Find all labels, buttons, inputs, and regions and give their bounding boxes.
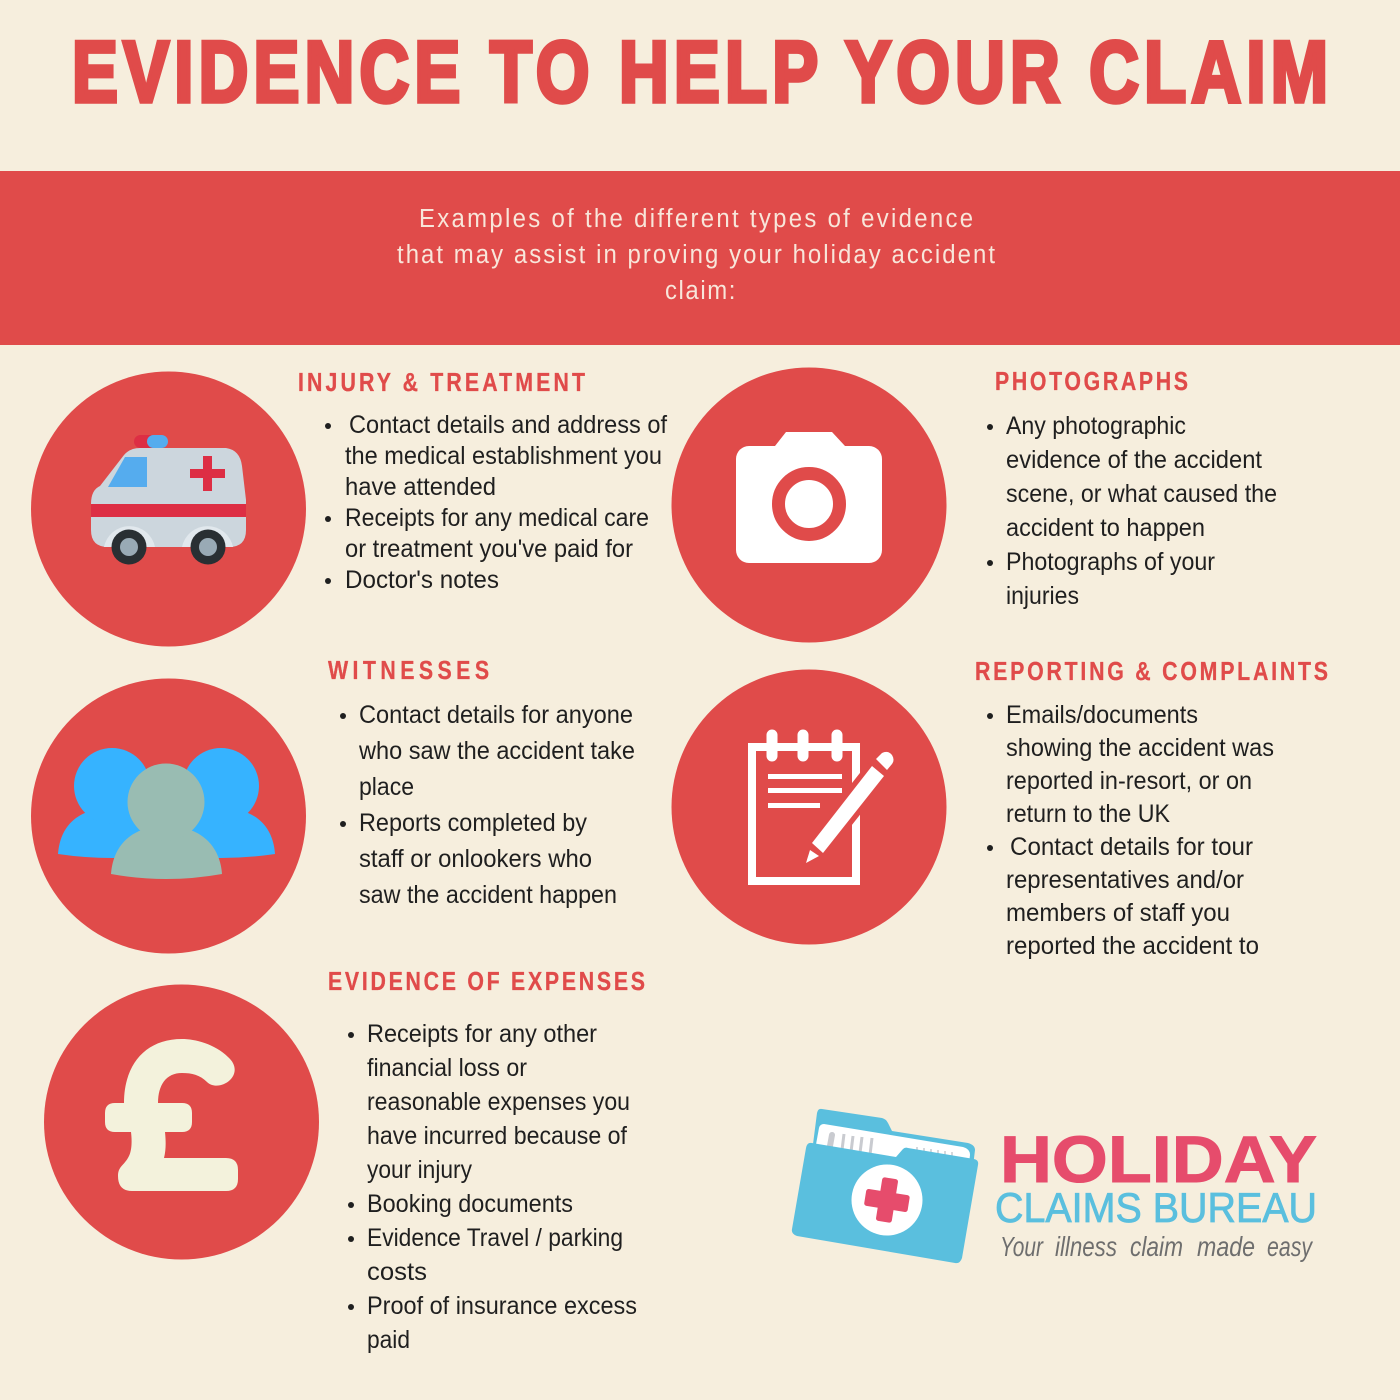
- panel: reporting and complaints: [672, 657, 1328, 960]
- list: expenses: costs: [367, 1258, 427, 1286]
- logo: Holiday Claims Bureau: [792, 1109, 1317, 1263]
- logo wordmark: Claims Bureau: CLAIMS BUREAU: [995, 1184, 1317, 1231]
- title: EVIDENCE TO HELP YOUR CLAIM: [72, 24, 1328, 121]
- panel: photographs: [672, 367, 1277, 642]
- list: photographs: scene, or what caused the: [1006, 480, 1277, 508]
- panel: witnesses: [31, 656, 635, 954]
- list: witnesses: Contact details for anyone: [359, 701, 633, 729]
- logo tagline: easy: [1267, 1231, 1314, 1262]
- list: expenses: [348, 1020, 637, 1354]
- list: injury and treatment: have attended: [345, 473, 496, 501]
- list: expenses: Receipts for any other: [367, 1020, 597, 1048]
- list: injury and treatment: the medical establishment you: [345, 442, 662, 470]
- list: expenses: financial loss or: [367, 1054, 527, 1082]
- panel: injury and treatment: [31, 368, 667, 646]
- list: reporting: Emails/documents: [1006, 701, 1198, 729]
- list: expenses: your injury: [367, 1156, 472, 1184]
- heading: injury and treatment: INJURY & TREATMENT: [298, 368, 585, 398]
- logo tagline: claim: [1130, 1231, 1183, 1262]
- list: injury and treatment: Doctor's notes: [345, 566, 499, 594]
- list: reporting: members of staff you: [1006, 899, 1230, 927]
- list: witnesses: [340, 701, 635, 909]
- list: expenses: Booking documents: [367, 1190, 573, 1218]
- list: reporting: [987, 701, 1274, 960]
- list: reporting: reported the accident to: [1006, 932, 1259, 960]
- icon: pound sign: [44, 984, 319, 1260]
- list: witnesses: place: [359, 773, 414, 801]
- icon: notepad and pencil: [672, 670, 946, 944]
- heading: reporting and complaints: REPORTING & COMPLAINTS: [975, 657, 1328, 687]
- list: photographs: injuries: [1006, 582, 1079, 610]
- list: photographs: Photographs of your: [1006, 548, 1215, 576]
- banner: introduction: Examples of the different types of evidence: [419, 204, 973, 233]
- heading: witnesses: WITNESSES: [328, 656, 489, 686]
- list: expenses: Proof of insurance excess: [367, 1292, 637, 1320]
- list: witnesses: Reports completed by: [359, 809, 587, 837]
- icon: ambulance: [31, 372, 306, 646]
- list: injury and treatment: Contact details and address of: [349, 411, 667, 439]
- list: witnesses: who saw the accident take: [358, 737, 635, 765]
- list: photographs: Any photographic: [1006, 412, 1186, 440]
- logo wordmark: Holiday: HOLIDAY: [1000, 1122, 1317, 1196]
- list: expenses: Evidence Travel / parking: [367, 1224, 623, 1252]
- logo tagline: Your: [1000, 1231, 1044, 1262]
- banner: introduction: claim:: [665, 276, 735, 305]
- list: witnesses: saw the accident happen: [359, 881, 617, 909]
- list: photographs: [987, 412, 1277, 610]
- icon: medical folder: [792, 1109, 978, 1263]
- list: reporting: reported in-resort, or on: [1006, 767, 1252, 795]
- list: expenses: have incurred because of: [367, 1122, 627, 1150]
- list: expenses: paid: [367, 1326, 410, 1354]
- banner: introduction: [0, 171, 1400, 345]
- logo tagline: illness: [1055, 1231, 1117, 1262]
- list: photographs: evidence of the accident: [1006, 446, 1262, 474]
- list: witnesses: staff or onlookers who: [359, 845, 592, 873]
- icon: camera: [672, 368, 946, 642]
- icon: people: [31, 678, 306, 954]
- list: injury and treatment: Receipts for any medical care: [345, 504, 649, 532]
- heading: evidence of expenses: EVIDENCE OF EXPENSES: [328, 967, 645, 997]
- list: injury and treatment: or treatment you've paid for: [345, 535, 633, 563]
- banner: introduction: that may assist in proving your holiday accident: [397, 240, 995, 269]
- panel: evidence of expenses: [44, 967, 645, 1354]
- logo tagline: made: [1197, 1231, 1255, 1262]
- list: injury and treatment: [325, 411, 667, 594]
- list: reporting: return to the UK: [1006, 800, 1170, 828]
- heading: photographs: PHOTOGRAPHS: [995, 367, 1188, 397]
- list: reporting: showing the accident was: [1006, 734, 1274, 762]
- list: reporting: representatives and/or: [1006, 866, 1244, 894]
- list: photographs: accident to happen: [1006, 514, 1205, 542]
- list: expenses: reasonable expenses you: [367, 1088, 630, 1116]
- list: reporting: Contact details for tour: [1010, 833, 1253, 861]
